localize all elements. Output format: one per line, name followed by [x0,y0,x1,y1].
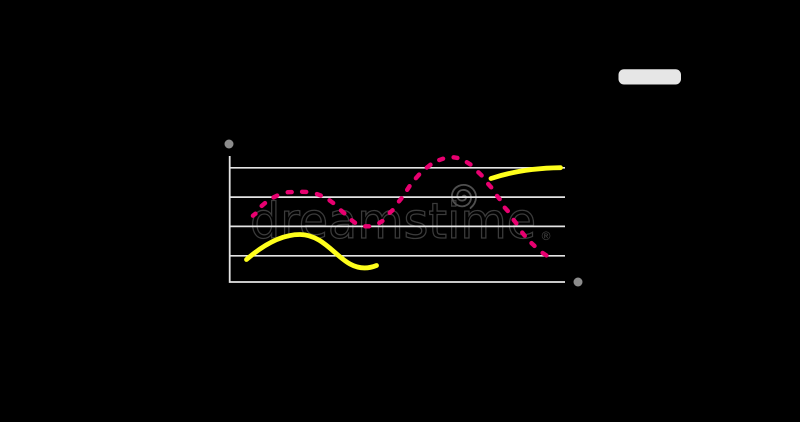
series: yellow right curve [491,168,560,178]
watermark registered mark: ® [542,229,551,243]
watermark [250,185,551,250]
series: pink dashed [252,157,548,257]
watermark spiral [452,185,476,208]
chart [224,140,582,286]
axis end dot: y [224,140,234,148]
series: yellow left curve [246,234,376,268]
axis end dot: x [574,278,582,286]
axes [230,156,565,282]
pill button [618,69,681,84]
watermark text: dreamstime [250,193,536,250]
gridlines [230,168,565,256]
